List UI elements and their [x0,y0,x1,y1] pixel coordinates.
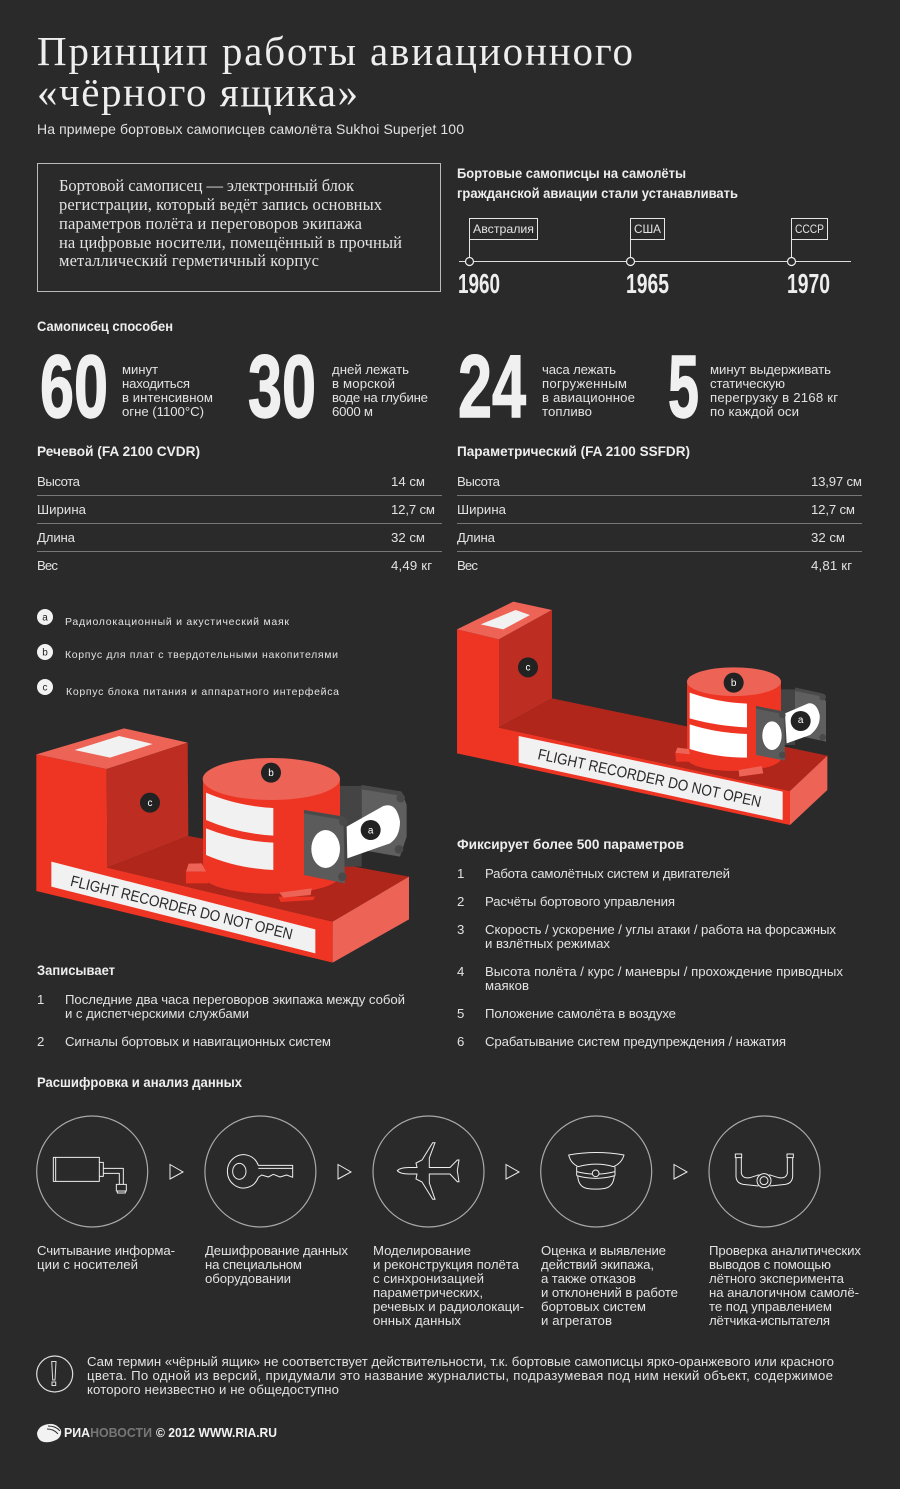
illustration: voice recorder: FLIGHT RECORDER DO NOT OPEN [69,873,294,944]
step 4: assessment: Оценка и выявление [541,1243,666,1258]
heading: decoding and analysis: Расшифровка и анализ данных [37,1075,242,1090]
list: recorded parameters: Срабатывание систем предупреждения / нажатия [485,1034,786,1049]
stat: 5 minutes: 5 [668,336,699,436]
legend: b [42,648,48,658]
stat: 60 minutes [40,336,213,436]
table: parametric recorder specs: 12,7 см [811,502,855,517]
marker: 1965 USA: 1965 [626,268,669,299]
table: parametric recorder specs: Длина [457,530,496,545]
stat: 60 minutes: огне (1100°С) [122,404,204,419]
step 4: assessment [541,1116,678,1328]
panel: definition: металлический герметичный корпус [59,251,319,270]
arrow [506,1164,519,1179]
stat: 60 minutes: 60 [40,336,108,436]
step 4: assessment: и агрегатов [541,1313,612,1328]
icon: exclamation mark [37,1356,73,1392]
step 4: assessment: действий экипажа, [541,1257,654,1272]
stat: 60 minutes: находиться [122,376,190,391]
title: Принцип работы авиационного [37,28,633,74]
note with warning icon: которого неизвестно и не общедоступно [87,1382,339,1397]
panel: definition: на цифровые носители, помещённый в прочный [59,233,402,252]
marker: 1965 USA [626,218,669,299]
list: recorded parameters: 1 [457,866,464,881]
step 3: modelling: с синхронизацией [373,1271,484,1286]
illustration: parametric recorder [457,602,827,825]
stat: 5 minutes: перегрузку в 2168 кг [710,390,838,405]
heading: installation timeline: гражданской авиации стали устанавливать [457,186,738,201]
table: parametric recorder specs: Ширина [457,502,507,517]
marker: 1960 Australia [458,218,538,299]
arrow [674,1164,687,1179]
list: what the voice recorder writes: и с диспетчерскими службами [65,1006,249,1021]
illustration: voice recorder: c [147,798,152,809]
step 1: reading: Считывание информа- [37,1243,175,1258]
step 4: assessment: бортовых систем [541,1299,646,1314]
step 3: modelling: Моделирование [373,1243,471,1258]
step 4: assessment: а также отказов [541,1271,636,1286]
list: recorded parameters: 2 [457,894,464,909]
table: parametric recorder specs: 13,97 см [811,474,862,489]
stat: 30 days: дней лежать [332,362,409,377]
table: parametric recorder specs: Высота [457,474,501,489]
legend: Корпус для плат с твердотельными накопителями [65,649,338,661]
stat: 30 days: 6000 м [332,404,373,419]
illustration: parametric recorder: c [525,663,530,674]
list: recorded parameters: 6 [457,1034,464,1049]
table: parametric recorder specs: Вес [457,558,478,573]
note with warning icon: цвета. По одной из версий, придумали это название журналисты, подразумевая под ним некий объект, содержимое [87,1368,833,1383]
table: voice recorder specs: 4,49 кг [391,558,432,573]
step 1: reading [37,1116,175,1272]
stat: 5 minutes: статическую [710,376,785,391]
stat: 24 hours: часа лежать [542,362,616,377]
panel: definition: параметров полёта и переговоров экипажа [59,214,363,233]
icon: recorder with cable [53,1157,126,1193]
chart: timeline [458,218,851,299]
logo: RIA Novosti [37,1424,277,1442]
step 3: modelling: онных данных [373,1313,461,1328]
marker: 1970 USSR: 1970 [787,268,830,299]
illustration: voice recorder: b [268,768,274,779]
step 5: verification: лётчика-испытателя [709,1313,830,1328]
logo: RIA Novosti: © 2012 WWW.RIA.RU [156,1425,277,1440]
step 3: modelling: и реконструкция полёта [373,1257,520,1272]
stat: 60 minutes: минут [122,362,158,377]
table: parametric recorder specs: 32 см [811,530,845,545]
list: recorded parameters: Положение самолёта в воздухе [485,1006,676,1021]
subtitle: На примере бортовых самописцев самолёта Sukhoi Superjet 100 [37,121,464,137]
marker: 1965 USA: США [634,222,661,236]
heading: capabilities: Самописец способен [37,319,173,334]
list: what the voice recorder writes: Последние два часа переговоров экипажа между собой [65,992,405,1007]
step 5: verification [709,1116,861,1328]
legend: c [42,682,48,694]
arrow [338,1164,351,1179]
icon: pilot cap [569,1152,624,1189]
list: recorded parameters: Работа самолётных систем и двигателей [485,866,730,881]
list: recorded parameters: Высота полёта / курс / маневры / прохождение приводных [485,964,843,979]
step 2: decoding: на специальном [205,1257,302,1272]
stat: 24 hours: топливо [542,404,592,419]
stat: 60 minutes: в интенсивном [122,390,213,405]
step 2: decoding: Дешифрование данных [205,1243,348,1258]
list: recorded parameters: Расчёты бортового управления [485,894,675,909]
table: voice recorder specs: Высота [37,474,81,489]
step 3: modelling: речевых и радиолокаци- [373,1299,524,1314]
marker: 1960 Australia: Австралия [473,222,534,236]
table: voice recorder specs [37,444,442,573]
legend [37,609,339,698]
stat: 24 hours: в авиационное [542,390,635,405]
stat: 24 hours: погруженным [542,376,627,391]
illustration: voice recorder: a [368,825,374,836]
stat: 30 days: воде на глубине [332,390,428,405]
legend: Радиолокационный и акустический маяк [65,616,289,628]
note with warning icon: Сам термин «чёрный ящик» не соответствует действительности, т.к. бортовые самописцы ярко-оранжевого или красного [87,1354,834,1369]
step 5: verification: на аналогичном самолё- [709,1285,859,1300]
icon: control yoke [735,1154,793,1188]
logo: RIA Novosti: РИАНОВОСТИ [64,1425,152,1440]
stat: 30 days: в морской [332,376,395,391]
table: voice recorder specs: 32 см [391,530,425,545]
illustration: voice recorder [36,728,409,963]
list: recorded parameters: Фиксирует более 500 параметров [457,837,684,852]
list: what the voice recorder writes: Записывает [37,963,115,978]
step 5: verification: те под управлением [709,1299,832,1314]
legend: a [42,612,48,624]
step 2: decoding: оборудовании [205,1271,291,1286]
table: voice recorder specs: 14 см [391,474,425,489]
marker: 1970 USSR [787,218,830,299]
table: voice recorder specs: Длина [37,530,76,545]
table: parametric recorder specs: 4,81 кг [811,558,852,573]
stat: 5 minutes [668,336,838,436]
list: what the voice recorder writes [37,963,405,1049]
table: parametric recorder specs [457,444,862,573]
illustration: parametric recorder: a [798,715,804,726]
step 3: modelling [373,1116,524,1328]
step 2: decoding [205,1116,348,1286]
stat: 24 hours [458,336,635,436]
icon: airplane [397,1143,459,1199]
list: recorded parameters: маяков [485,978,529,993]
arrow [170,1164,183,1179]
list: recorded parameters: Скорость / ускорение / углы атаки / работа на форсажных [485,922,836,937]
heading: installation timeline: Бортовые самописцы на самолёты [457,166,686,181]
step 5: verification: выводов с помощью [709,1257,831,1272]
table: voice recorder specs: Ширина [37,502,87,517]
panel: definition [38,164,440,292]
step 5: verification: Проверка аналитических [709,1243,861,1258]
table: parametric recorder specs: Параметрический (FA 2100 SSFDR) [457,444,690,459]
stat: 30 days: 30 [248,336,316,436]
step 4: assessment: и отклонений в работе [541,1285,678,1300]
stat: 24 hours: 24 [458,336,526,436]
stat: 5 minutes: минут выдерживать [710,362,831,377]
list: recorded parameters: 3 [457,922,464,937]
icon: key [227,1155,293,1188]
list: recorded parameters: и взлётных режимах [485,936,610,951]
logo mark [37,1424,61,1442]
stat: 5 minutes: по каждой оси [710,404,799,419]
step 1: reading: ции с носителей [37,1257,138,1272]
stat: 30 days [248,336,428,436]
step 3: modelling: параметрических, [373,1285,483,1300]
title: «чёрного ящика» [37,69,358,115]
list: recorded parameters: 5 [457,1006,464,1021]
marker: 1960 Australia: 1960 [458,268,500,299]
legend: Корпус блока питания и аппаратного интерфейса [66,686,339,698]
marker: 1970 USSR: СССР [795,222,824,236]
heading: installation timeline [457,166,738,201]
panel: definition: регистрации, который ведёт запись основных [59,195,383,214]
list: what the voice recorder writes: 1 [37,992,44,1007]
illustration: parametric recorder: FLIGHT RECORDER DO NOT OPEN [536,746,763,811]
title [37,28,633,115]
table: voice recorder specs: Речевой (FA 2100 CVDR) [37,444,200,459]
table: voice recorder specs: 12,7 см [391,502,435,517]
note with warning icon [37,1354,834,1397]
list: what the voice recorder writes: 2 [37,1034,44,1049]
step 5: verification: лётного эксперимента [709,1271,845,1286]
list: what the voice recorder writes: Сигналы бортовых и навигационных систем [65,1034,331,1049]
illustration: parametric recorder: b [731,678,737,689]
list: recorded parameters: 4 [457,964,464,979]
table: voice recorder specs: Вес [37,558,58,573]
panel: definition: Бортовой самописец — электронный блок [59,176,355,195]
list: recorded parameters [457,837,843,1049]
